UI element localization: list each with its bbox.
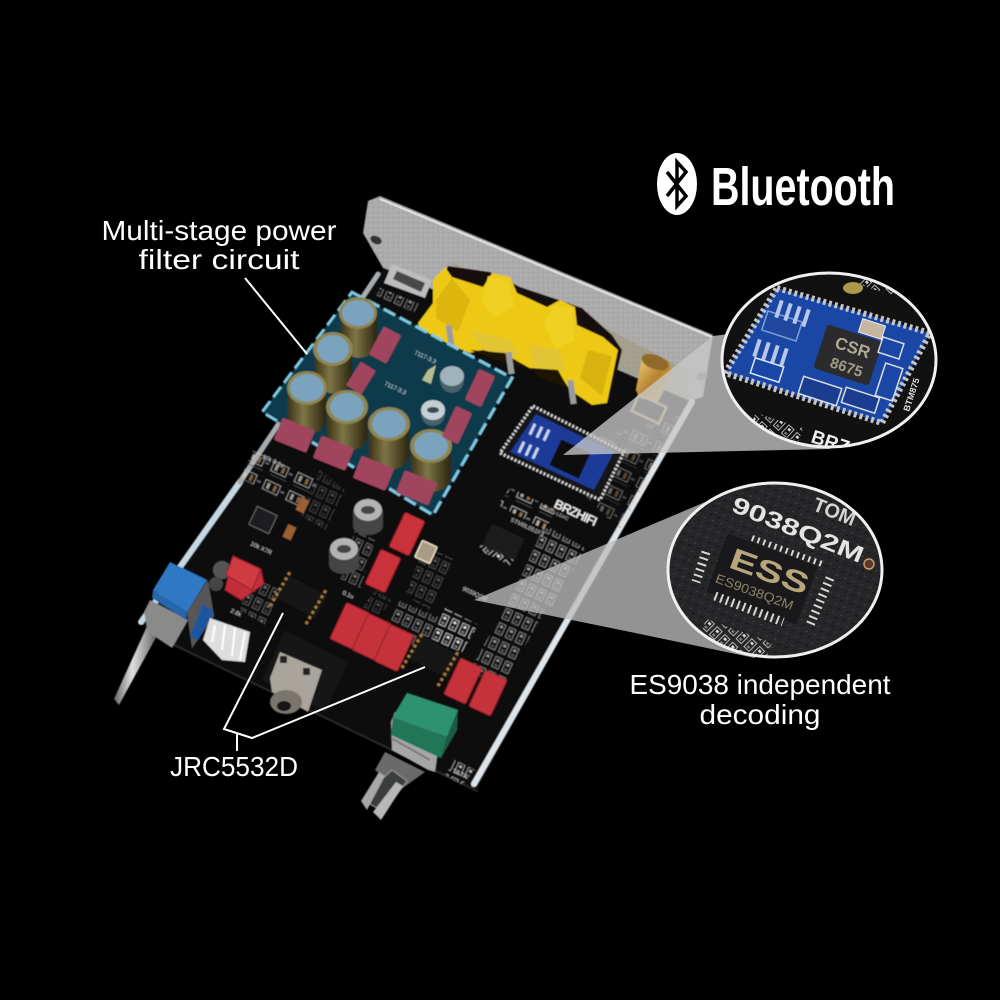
label: ES9038: decoding (700, 699, 820, 730)
brand marking: BRZHIFI (552, 496, 600, 529)
brand marking: STM8L051F3 (509, 517, 545, 538)
brand marking: BT875-LDAC (540, 504, 570, 523)
filter capacitor (368, 407, 410, 470)
ES9038Q2M chip: ES9038Q2M (713, 571, 796, 613)
toggle switch (114, 562, 214, 705)
STM8 chip (478, 524, 525, 565)
magnified circle (660, 480, 890, 665)
filter capacitor (287, 371, 327, 434)
CSR 8675 chip (813, 324, 883, 386)
silkscreen labels: 7117-3.3 (383, 381, 407, 397)
filter capacitor (326, 390, 368, 451)
op-amp chips (270, 572, 460, 686)
magnified circle: TOM (810, 494, 859, 531)
CSR 8675 chip: CSR (833, 333, 873, 362)
label: power filter: Multi-stage power (102, 215, 336, 246)
silkscreen values (229, 454, 488, 780)
silkscreen values: 2.8k (229, 608, 243, 619)
metal rear panel (363, 196, 713, 401)
panel: multi-stage power filter (262, 292, 512, 515)
label: power filter: filter circuit (138, 244, 300, 275)
bluetooth logo (657, 153, 895, 217)
silkscreen labels: 7117-3.3 (413, 350, 437, 366)
label: power filter (102, 215, 336, 354)
film capacitors (274, 326, 495, 505)
label: ES9038: ES9038 independent (630, 669, 891, 700)
product: circuit board (114, 196, 713, 820)
crystal (415, 540, 437, 564)
silkscreen component areas (240, 415, 680, 785)
ES9038Q2M chip: ESS (725, 543, 813, 602)
silkscreen values: 10k X7R (249, 541, 273, 557)
silkscreen labels (383, 350, 437, 397)
filter capacitor (339, 297, 377, 358)
silkscreen values: 10k 0.1u (261, 454, 285, 470)
small electrolytic capacitors (329, 499, 383, 574)
red film capacitors (225, 512, 507, 716)
small silver capacitors (421, 365, 464, 426)
filter capacitor (313, 332, 353, 393)
yellow connector (418, 266, 622, 405)
projection beam (474, 500, 755, 658)
regulator and small parts (209, 497, 309, 591)
zoom callout: Bluetooth chip (563, 270, 940, 459)
label: JRC5532D (170, 613, 425, 782)
acrylic edges (141, 274, 692, 791)
magnified circle: BRZ (808, 427, 852, 459)
brand marking (509, 496, 600, 538)
magnified circle: BTM875 (901, 377, 922, 413)
headphone jack (262, 630, 348, 714)
ES9038Q2M chip (696, 533, 830, 625)
wordmark: Bluetooth (711, 157, 895, 217)
silkscreen values: 0.1u (341, 590, 354, 601)
label: JRC5532D: JRC5532D (170, 751, 298, 782)
PCB surface (138, 268, 690, 790)
magnified circle (720, 270, 940, 459)
potentiometer (361, 693, 458, 820)
gold antenna connector (632, 351, 672, 423)
CSR 8675 chip: 8675 (828, 354, 865, 381)
bluetooth module (500, 406, 624, 500)
silkscreen values: 9038Q2M (461, 586, 488, 603)
zoom callout: ES9038 chip (474, 480, 890, 665)
white connector (203, 618, 250, 662)
magnified circle: 9038Q2M (728, 491, 868, 568)
USB-C port (376, 264, 432, 312)
label: ES9038 (630, 669, 891, 730)
silkscreen values: TA TA (451, 768, 468, 780)
filter capacitor (410, 429, 452, 492)
icon: bluetooth (657, 153, 697, 215)
projection beam (563, 330, 830, 455)
